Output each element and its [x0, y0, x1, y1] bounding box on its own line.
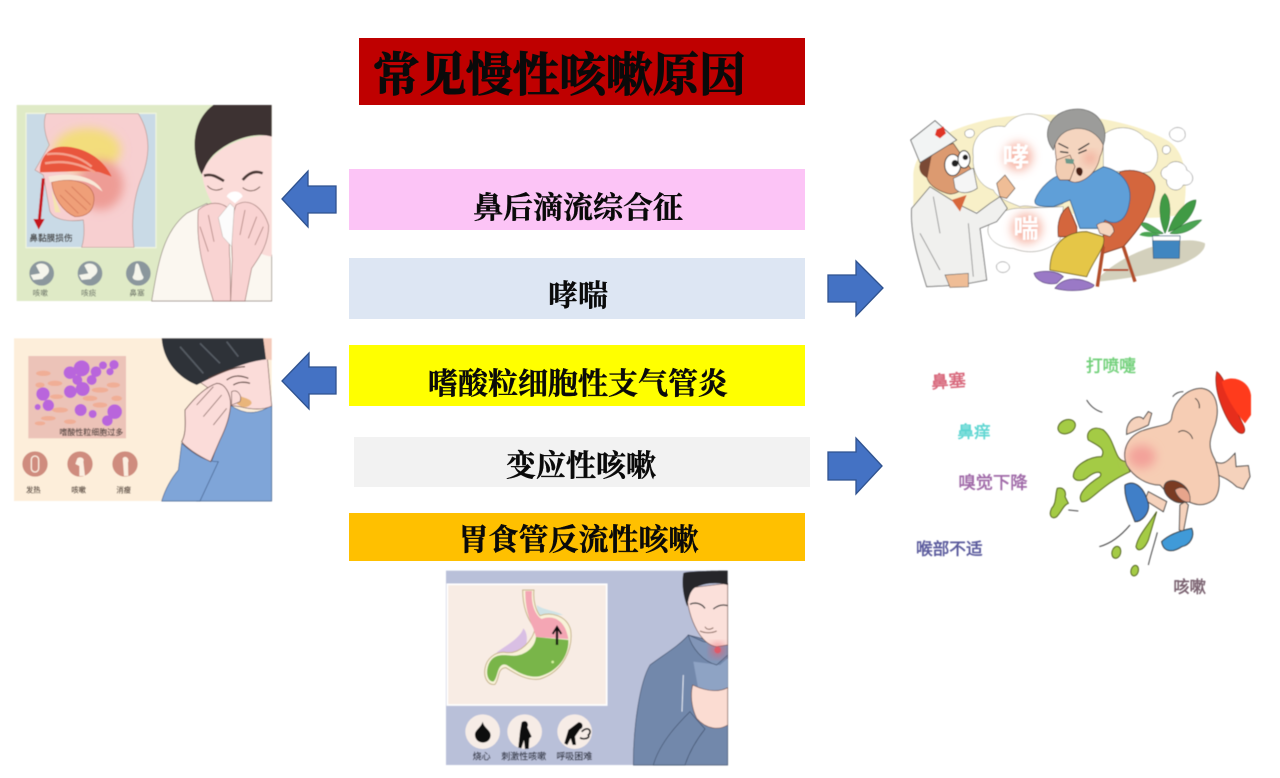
thought clouds: 哮 — [1003, 143, 1029, 173]
icon row: symptoms — [29, 261, 151, 298]
arrow: right to allergic image — [828, 438, 882, 494]
icon row: symptoms: 咳痰 — [81, 288, 97, 298]
bar: eosinophilic bronchitis — [349, 345, 805, 406]
bar: allergic cough — [354, 437, 810, 487]
figure: doctor — [911, 121, 1015, 287]
symptom labels — [916, 357, 1206, 596]
bar: allergic cough: 变应性咳嗽 — [506, 449, 656, 483]
panel: post-nasal drip illustration — [17, 105, 272, 301]
figure: cartoon nose — [1125, 372, 1251, 551]
figure: woman blowing nose — [152, 105, 272, 301]
inset: eosinophil cells — [28, 356, 126, 438]
thought clouds — [965, 114, 1193, 272]
icon row: symptoms: 发热 — [26, 486, 41, 495]
icon row: symptoms: 鼻塞 — [129, 288, 145, 298]
icon row: symptoms — [465, 714, 592, 761]
title — [359, 38, 805, 105]
panel: reflux illustration — [446, 571, 728, 765]
mucus spray — [1050, 417, 1157, 577]
icon row: symptoms: 刺激性咳嗽 — [501, 750, 546, 761]
thought clouds: 喘 — [1013, 215, 1039, 243]
figure: coughing man — [162, 338, 272, 501]
arrow: right to asthma image — [828, 261, 883, 316]
bar: post-nasal drip syndrome — [349, 169, 805, 230]
icon row: symptoms: 消瘦 — [116, 486, 132, 495]
inset: nasal cross-section: 鼻黏膜损伤 — [29, 232, 73, 243]
title: 常见慢性咳嗽原因 — [373, 50, 746, 102]
arrow: left to post-nasal drip image — [282, 171, 336, 227]
figure: man holding chest — [633, 571, 728, 765]
symptom labels: 打喷嚏 — [1086, 357, 1136, 376]
icon row: symptoms: 咳嗽 — [71, 486, 87, 495]
bar: asthma: 哮喘 — [548, 279, 608, 313]
panel: asthma illustration — [911, 109, 1205, 291]
panel: allergic cough illustration — [916, 357, 1251, 596]
icon row: symptoms: 烧心 — [473, 750, 491, 761]
bar: eosinophilic bronchitis: 嗜酸粒细胞性支气管炎 — [428, 368, 730, 401]
icon row: symptoms: 咳嗽 — [33, 288, 48, 298]
symptom labels: 喉部不适 — [916, 539, 983, 558]
symptom labels: 鼻痒 — [957, 423, 991, 442]
icon row: symptoms — [22, 451, 138, 495]
icon row: symptoms: 呼吸困难 — [556, 751, 592, 761]
inset: nasal cross-section — [26, 113, 156, 248]
symptom labels: 鼻塞 — [931, 370, 967, 392]
bar: asthma — [349, 258, 805, 319]
icon: potted plant — [1139, 193, 1202, 258]
bar: gastroesophageal reflux cough — [349, 513, 805, 561]
bar: gastroesophageal reflux cough: 胃食管反流性咳嗽 — [458, 524, 698, 557]
bar: post-nasal drip syndrome: 鼻后滴流综合征 — [473, 192, 683, 225]
arrow: left to eosinophilic image — [282, 353, 336, 409]
symptom labels: 咳嗽 — [1173, 578, 1206, 596]
panel: eosinophilic bronchitis illustration — [14, 338, 272, 501]
inset: stomach diagram — [447, 584, 607, 705]
inset: eosinophil cells: 嗜酸性粒细胞过多 — [59, 427, 123, 437]
symptom labels: 嗅觉下降 — [958, 472, 1028, 492]
figure: patient in chair — [1034, 109, 1155, 291]
